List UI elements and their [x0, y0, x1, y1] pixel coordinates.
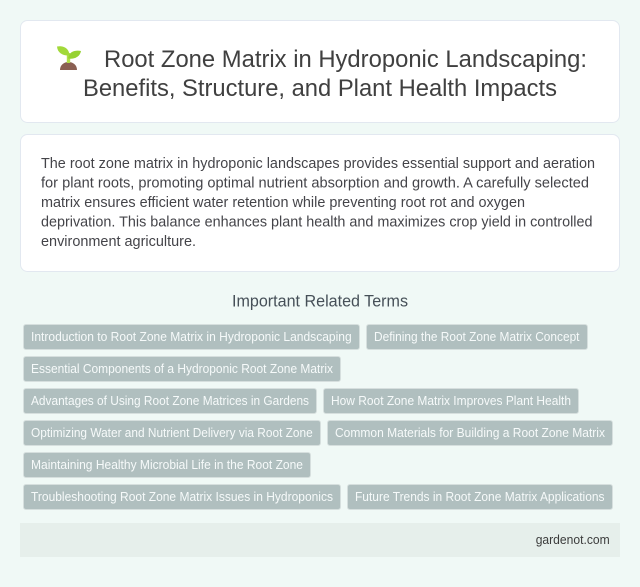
tag: [24, 452, 310, 478]
tag: [328, 420, 612, 446]
title: Benefits, Structure, and Plant Health Impacts: [83, 75, 557, 102]
tag: Advantages of Using Root Zone Matrices in Gardens: [31, 394, 309, 408]
tag: Future Trends in Root Zone Matrix Applications: [355, 490, 604, 504]
tag: Introduction to Root Zone Matrix in Hydroponic Landscaping: [31, 330, 352, 344]
title: Root Zone Matrix in Hydroponic Landscaping:: [104, 46, 587, 73]
tag: [24, 356, 340, 382]
tag: Common Materials for Building a Root Zone Matrix: [335, 426, 606, 440]
description text: environment agriculture.: [41, 234, 196, 250]
tag: [24, 324, 360, 350]
tag: [348, 484, 612, 510]
tag: [324, 388, 578, 414]
description text: The root zone matrix in hydroponic landscapes provides essential support and aeration: [41, 156, 595, 172]
description text: deprivation. This balance enhances plant health and maximizes crop yield in controlled: [41, 214, 592, 230]
panel: title card: [20, 20, 620, 122]
tag: Essential Components of a Hydroponic Root Zone Matrix: [31, 362, 334, 376]
related term tags: [24, 324, 612, 510]
heading: related terms: Important Related Terms: [232, 292, 408, 310]
tag: [24, 420, 320, 446]
tag: Optimizing Water and Nutrient Delivery via Root Zone: [31, 426, 313, 440]
tag: [24, 388, 316, 414]
title: [83, 46, 587, 102]
description text: [41, 156, 595, 250]
icon: seedling: [57, 46, 81, 70]
tag: Defining the Root Zone Matrix Concept: [374, 330, 580, 344]
tag: Troubleshooting Root Zone Matrix Issues in Hydroponics: [31, 490, 333, 504]
tag: How Root Zone Matrix Improves Plant Health: [331, 394, 571, 408]
footer: [20, 523, 620, 557]
footer source: gardenot.com: [536, 532, 610, 547]
tag: [366, 324, 588, 350]
tag: Maintaining Healthy Microbial Life in the Root Zone: [31, 458, 303, 472]
panel: description: [20, 134, 620, 272]
description text: for plant roots, promoting optimal nutrient absorption and growth. A carefully selected: [41, 176, 589, 192]
tag: [24, 484, 340, 510]
description text: matrix ensures efficient water retention while preventing root rot and oxygen: [41, 195, 525, 211]
